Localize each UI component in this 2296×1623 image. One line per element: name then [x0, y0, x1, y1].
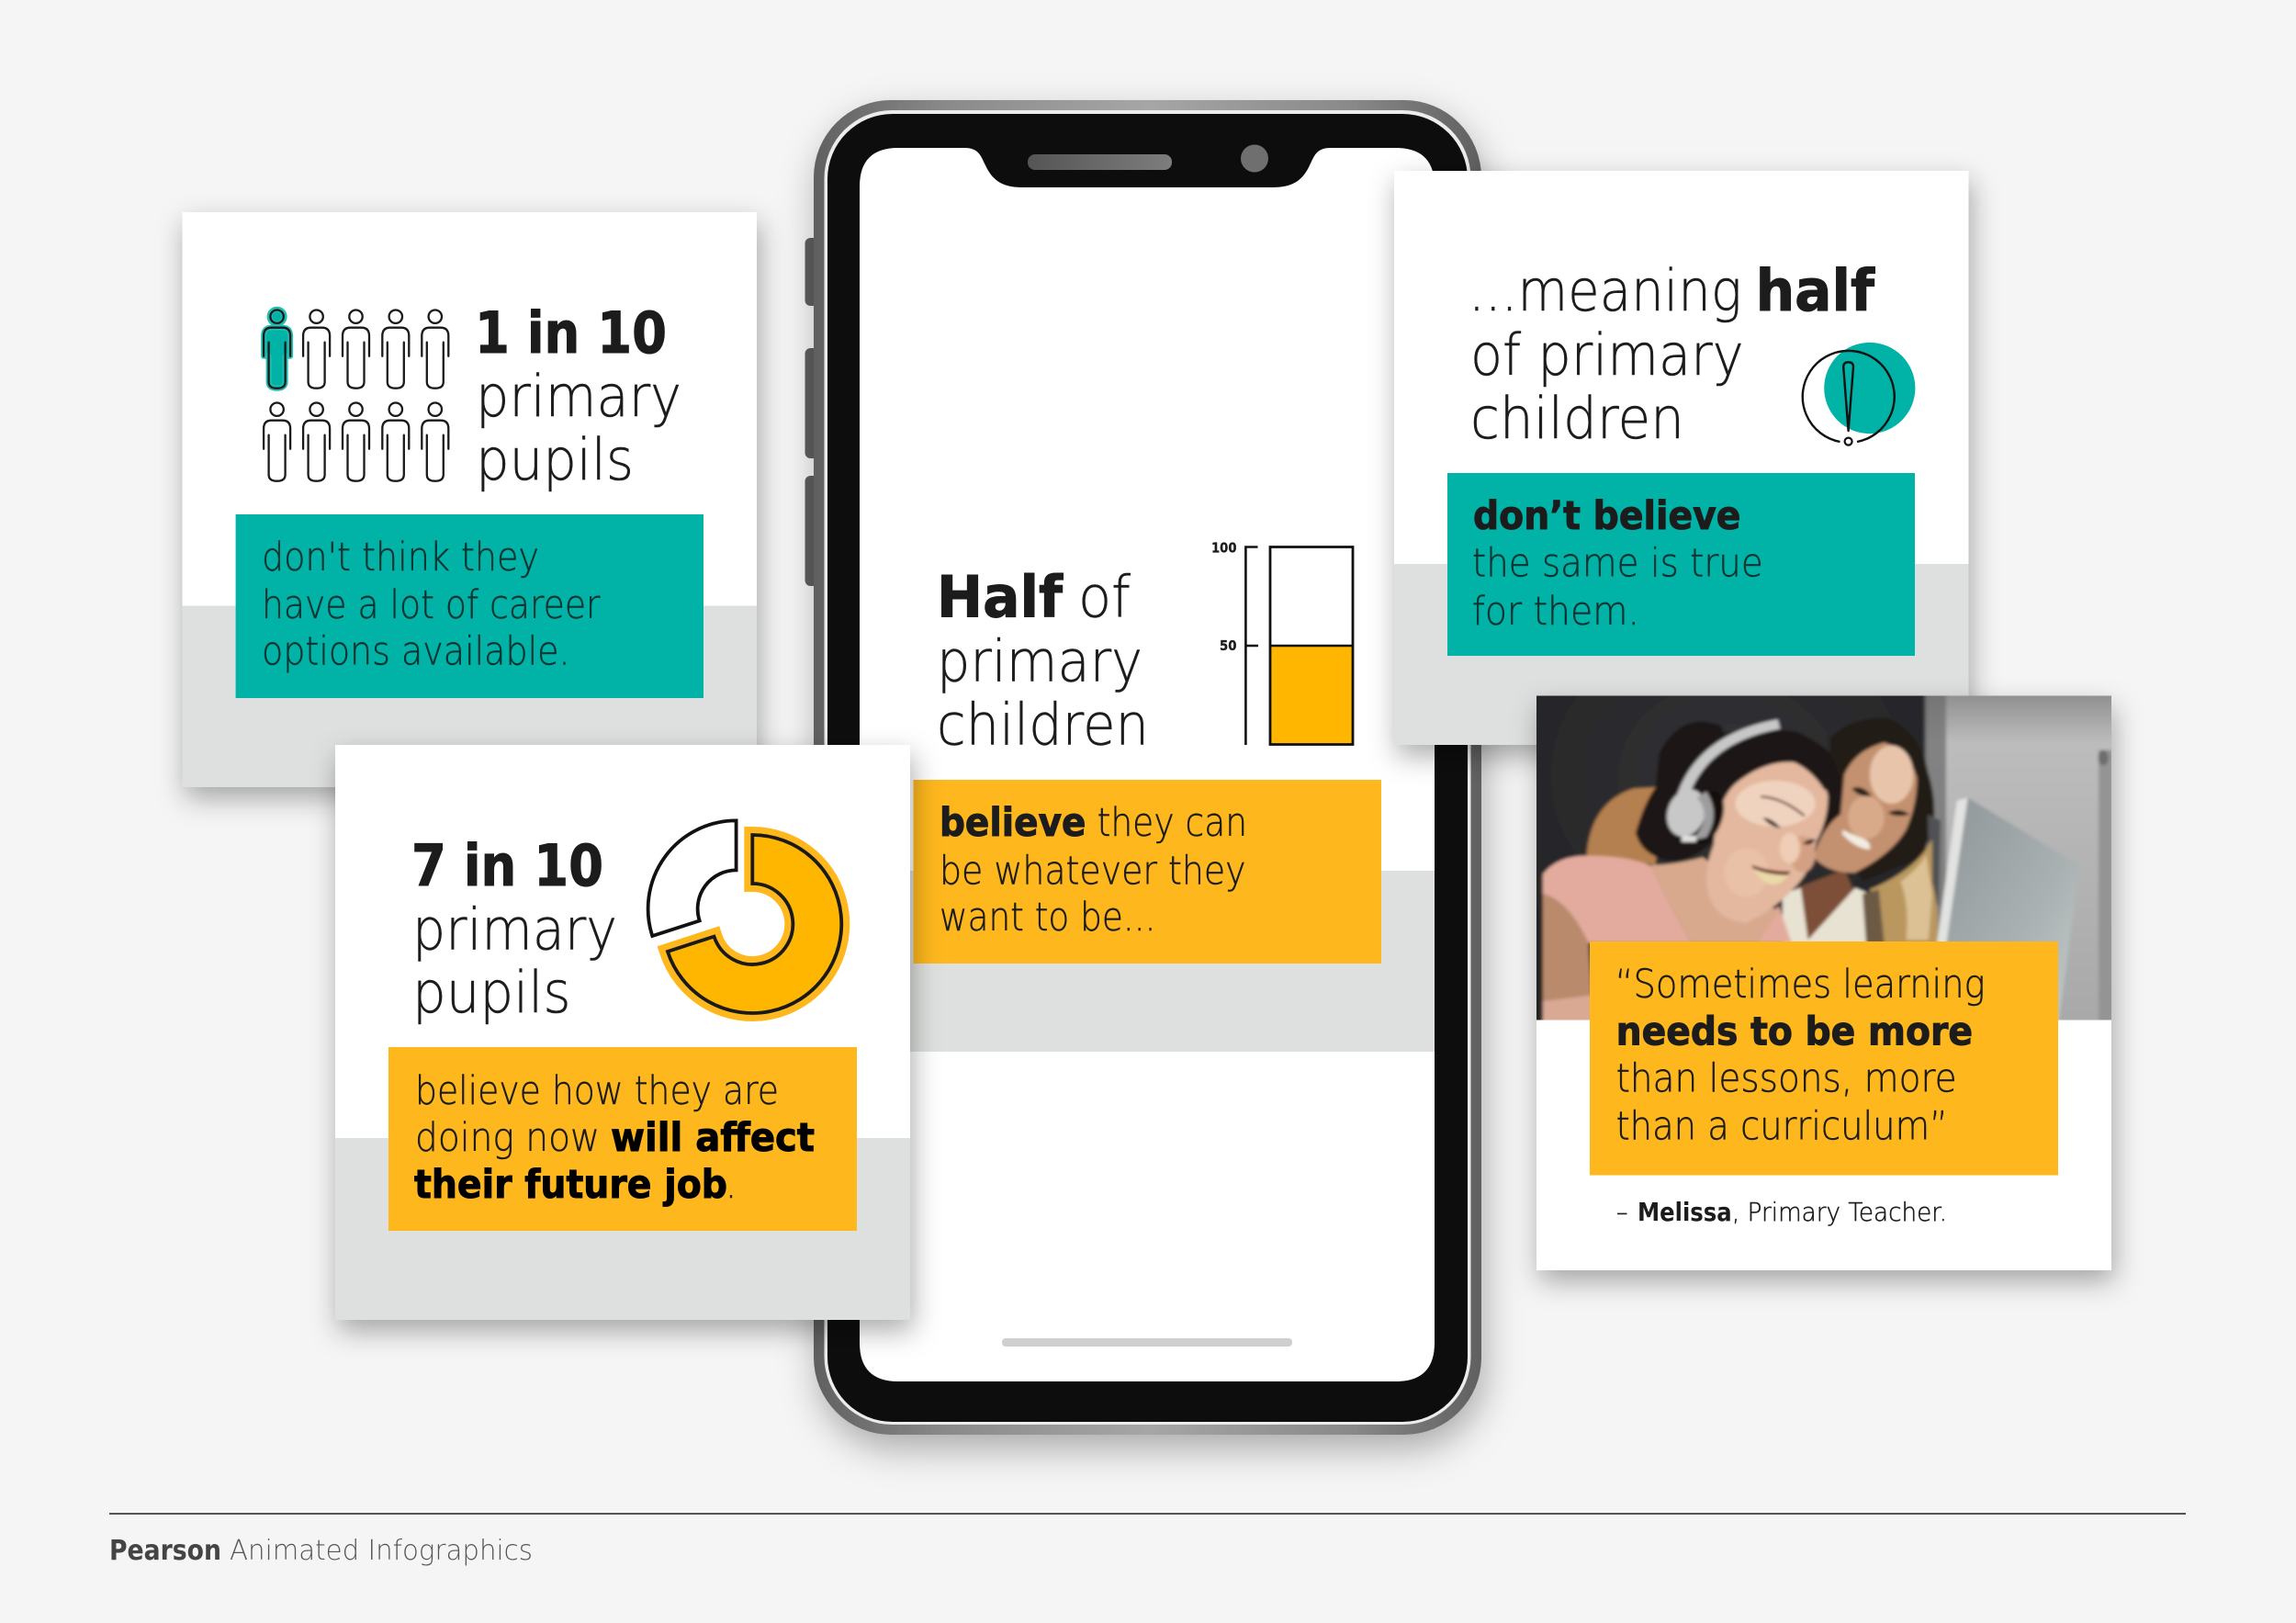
heading: Half of primary children: of	[1078, 564, 1131, 631]
attribution: Melissa	[1616, 1197, 1947, 1227]
donut chart: 70 percent	[648, 820, 841, 1013]
callout: believe they can: be whatever they	[940, 849, 1246, 895]
heading: 1 in 10 primary pupils: pupils	[476, 426, 634, 493]
callout: quote: needs to be more	[1616, 1009, 1973, 1055]
heading: 1 in 10 primary pupils: 1 in 10	[475, 299, 667, 366]
callout: career options: don't think they	[262, 535, 539, 580]
pictogram: 1 in 10 people	[264, 310, 448, 481]
callout: future job: .	[726, 1162, 737, 1208]
callout: career options: have a lot of career	[262, 582, 601, 628]
callout: career options	[236, 514, 703, 698]
bar chart: 50 of 100: 100	[1211, 540, 1236, 557]
callout: future job: will affect	[611, 1115, 815, 1161]
heading: 7 in 10 primary pupils: primary	[412, 896, 617, 964]
panel: meaning half	[1394, 171, 1969, 745]
panel: half believe (on phone screen)	[860, 540, 1435, 1052]
heading: Half of primary children: Half	[937, 564, 1064, 631]
callout: future job: believe how they are	[415, 1068, 779, 1114]
heading: meaning half of primary children: ...meaning	[1469, 257, 1741, 324]
callout: believe they can	[913, 780, 1381, 964]
heading: meaning half of primary children: of primary	[1470, 321, 1744, 389]
panel: 1 in 10	[182, 212, 757, 787]
attribution: Melissa: –	[1616, 1197, 1627, 1227]
phone screen with notch	[860, 148, 1435, 1381]
phone mockup	[805, 100, 1481, 1435]
callout: future job: doing now	[415, 1115, 600, 1161]
heading: meaning half of primary children: children	[1470, 385, 1684, 452]
footer: rule and credit: Pearson	[109, 1535, 221, 1567]
icon: exclamation mark	[1803, 343, 1915, 445]
callout: future job: their future job	[414, 1162, 727, 1208]
heading: 1 in 10 primary pupils: primary	[476, 363, 681, 430]
heading: meaning half of primary children	[1469, 257, 1875, 452]
footer: rule and credit	[109, 1514, 2186, 1567]
heading: Half of primary children: children	[937, 692, 1149, 759]
callout: don't believe: the same is true	[1472, 540, 1763, 586]
callout: don't believe: for them.	[1472, 589, 1639, 635]
bar chart: 50 of 100	[1211, 540, 1353, 745]
photo: pupil with headphones and teacher at a laptop	[1528, 692, 2130, 1029]
callout: believe they can: believe	[940, 800, 1086, 846]
heading: 7 in 10 primary pupils	[411, 832, 617, 1026]
callout: quote: than lessons, more	[1616, 1056, 1957, 1102]
callout: believe they can: they can	[1097, 800, 1247, 846]
heading: meaning half of primary children: half	[1756, 257, 1875, 324]
heading: 7 in 10 primary pupils: pupils	[412, 959, 571, 1026]
heading: Half of primary children: primary	[937, 628, 1142, 695]
heading: 1 in 10 primary pupils	[475, 299, 681, 493]
heading: Half of primary children	[937, 564, 1149, 759]
phone speaker	[1028, 154, 1172, 170]
footer: rule and credit: Animated Infographics	[230, 1535, 533, 1567]
phone home bar	[1002, 1338, 1292, 1347]
callout: quote: than a curriculum”	[1616, 1104, 1948, 1150]
panel: teacher quote	[1528, 692, 2130, 1270]
callout: quote: “Sometimes learning	[1615, 962, 1986, 1008]
attribution: Melissa: , Primary Teacher.	[1732, 1197, 1947, 1227]
bar chart: 50 of 100: 50	[1220, 637, 1236, 654]
callout: career options: options available.	[262, 628, 570, 674]
heading: 7 in 10 primary pupils: 7 in 10	[411, 832, 603, 899]
callout: future job	[388, 1047, 857, 1231]
panel: 7 in 10	[335, 745, 910, 1320]
phone camera	[1241, 145, 1268, 173]
attribution: Melissa: Melissa	[1638, 1197, 1732, 1227]
callout: believe they can: want to be...	[940, 895, 1155, 941]
callout: quote	[1590, 941, 2058, 1176]
callout: don't believe: don’t believe	[1473, 493, 1741, 539]
callout: don't believe	[1447, 473, 1915, 656]
